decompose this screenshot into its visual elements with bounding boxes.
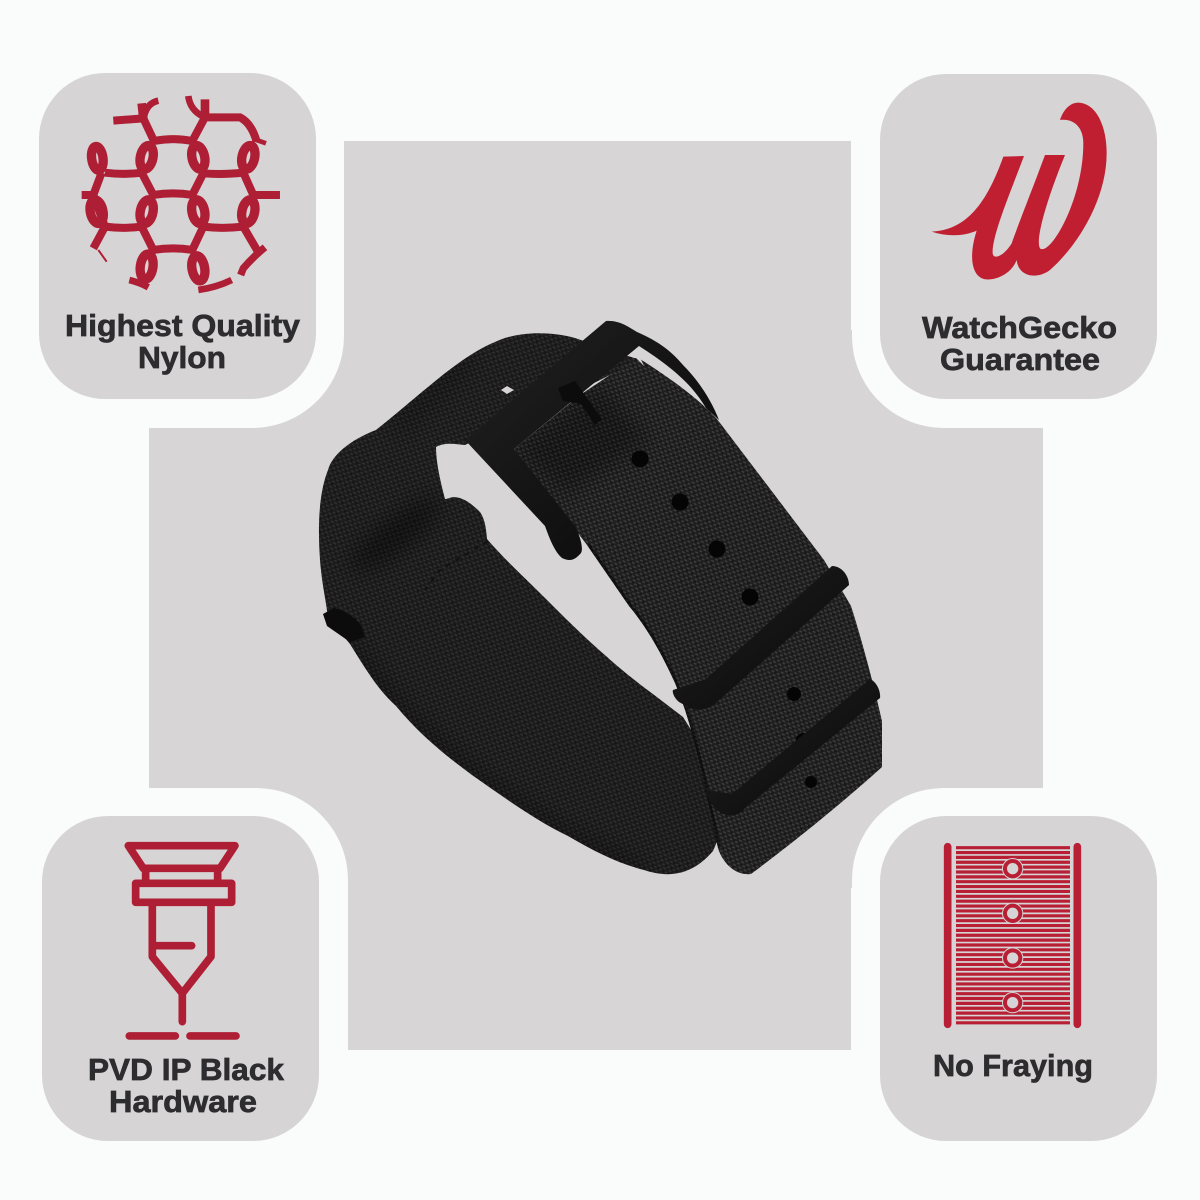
central grey cross backdrop (149, 141, 1043, 1050)
icon: woven strap with holes (948, 847, 1077, 1024)
heading: pvd ip black hardware: Hardware (109, 1084, 257, 1119)
panel: pvd ip black hardware (42, 816, 319, 1141)
buckle pin (558, 381, 602, 425)
heading: no fraying: No Fraying (933, 1048, 1093, 1083)
panel background (39, 73, 316, 399)
heading: highest quality nylon (65, 308, 301, 375)
strap: front tail with holes (514, 357, 882, 874)
keeper: left (323, 608, 365, 642)
heading: highest quality nylon: Highest Quality (65, 308, 301, 343)
heading: watchgecko guarantee: WatchGecko (922, 310, 1117, 345)
icon: pvd coating nozzle (128, 846, 236, 1036)
panel background (880, 74, 1157, 399)
heading: watchgecko guarantee: Guarantee (940, 342, 1100, 377)
strap: small gap in rear loop (501, 386, 514, 394)
heading: pvd ip black hardware (88, 1052, 285, 1119)
panel background (880, 816, 1157, 1141)
heading: highest quality nylon: Nylon (138, 340, 226, 375)
icon: nylon mesh (82, 96, 280, 290)
panel background (42, 816, 319, 1141)
heading: watchgecko guarantee (922, 310, 1117, 377)
strap holes (632, 450, 817, 788)
keeper: lower (706, 679, 880, 816)
panel: watchgecko guarantee (880, 74, 1157, 399)
keeper: upper (673, 566, 849, 710)
buckle (465, 321, 719, 560)
heading: pvd ip black hardware: PVD IP Black (88, 1052, 285, 1087)
watch strap illustration (319, 321, 882, 874)
icon: WatchGecko W logo (932, 103, 1107, 279)
panel: highest quality nylon (39, 73, 316, 399)
panel: no fraying (880, 816, 1157, 1141)
strap: rear loop (319, 333, 735, 874)
